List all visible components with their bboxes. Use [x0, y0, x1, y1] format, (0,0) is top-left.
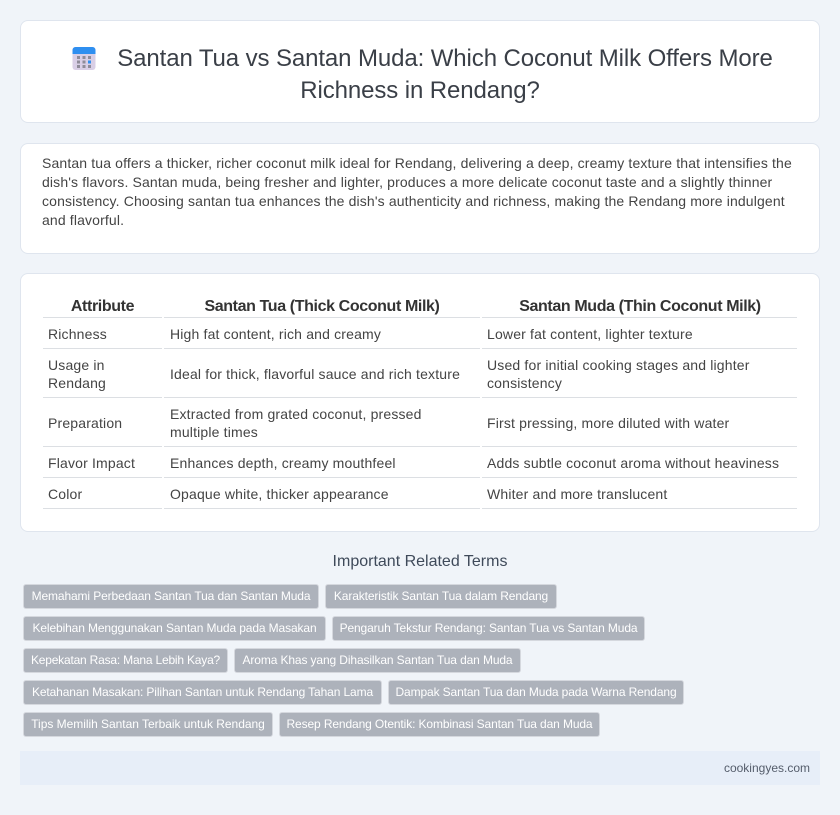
text block: introduction	[42, 155, 792, 228]
tag group: related terms: Aroma Khas yang Dihasilkan Santan Tua dan Muda	[242, 653, 512, 667]
table row: richness: Richness	[48, 326, 107, 342]
table row: color: Color	[48, 486, 82, 502]
table row: color	[48, 486, 668, 502]
table row: flavor impact: Enhances depth, creamy mouthfeel	[170, 455, 396, 471]
table row: flavor impact	[48, 455, 779, 471]
table row: preparation	[48, 406, 729, 440]
table row: richness: High fat content, rich and creamy	[170, 326, 381, 342]
tag group: related terms: Kepekatan Rasa: Mana Lebih Kaya?	[31, 653, 220, 667]
table row: color: Whiter and more translucent	[487, 486, 667, 502]
title: Richness in Rendang?	[300, 77, 540, 104]
table header row: Santan Tua (Thick Coconut Milk)	[204, 298, 440, 315]
footer	[20, 751, 820, 785]
tag group: related terms: Pengaruh Tekstur Rendang: Santan Tua vs Santan Muda	[340, 621, 637, 635]
panel: introduction	[20, 143, 820, 254]
tag group: related terms	[23, 584, 684, 737]
panel: comparison table	[20, 273, 820, 532]
table row: usage in rendang	[48, 357, 750, 391]
tag group: related terms: Karakteristik Santan Tua dalam Rendang	[334, 589, 548, 603]
footer source text: cookingyes.com	[724, 761, 810, 775]
tag group: related terms: Tips Memilih Santan Terbaik untuk Rendang	[31, 717, 265, 731]
tag group: related terms: Kelebihan Menggunakan Santan Muda pada Masakan	[32, 621, 317, 635]
title: Santan Tua vs Santan Muda: Which Coconut Milk Offers More	[117, 45, 773, 72]
title	[117, 45, 773, 104]
table header row: Attribute	[71, 298, 134, 315]
table row: preparation: First pressing, more diluted with water	[487, 415, 729, 431]
table row: preparation: multiple times	[170, 424, 258, 440]
text block: introduction: dish's flavors. Santan muda, being fresher and lighter, produces a more delicate coconut taste and a slightly thinner	[42, 174, 772, 190]
table row: flavor impact: Adds subtle coconut aroma without heaviness	[487, 455, 779, 471]
table row: usage in rendang: Usage in	[48, 357, 105, 373]
text block: introduction: and flavorful.	[42, 212, 124, 228]
tag group: related terms: Ketahanan Masakan: Pilihan Santan untuk Rendang Tahan Lama	[32, 685, 373, 699]
table header row: Santan Muda (Thin Coconut Milk)	[519, 298, 761, 315]
tag group: related terms: Resep Rendang Otentik: Kombinasi Santan Tua dan Muda	[287, 717, 592, 731]
panel: title header	[20, 20, 820, 123]
text block: introduction: Santan tua offers a thicker, richer coconut milk ideal for Rendang, delivering a deep, creamy texture that intensifies the	[42, 155, 792, 171]
tag group: related terms: Memahami Perbedaan Santan Tua dan Santan Muda	[32, 589, 310, 603]
table row: richness	[48, 326, 693, 342]
table header row	[71, 298, 761, 315]
table row: preparation: Extracted from grated coconut, pressed	[170, 406, 422, 422]
tag group: related terms: Dampak Santan Tua dan Muda pada Warna Rendang	[395, 685, 676, 699]
table row: usage in rendang: Used for initial cooking stages and lighter	[487, 357, 750, 373]
table row: usage in rendang: consistency	[487, 375, 562, 391]
table row: usage in rendang: Rendang	[48, 375, 106, 391]
heading: important related terms: Important Related Terms	[333, 553, 507, 570]
table row: flavor impact: Flavor Impact	[48, 455, 135, 471]
text block: introduction: consistency. Choosing santan tua enhances the dish's authenticity and richness, making the Rendang more indulgent	[42, 193, 785, 209]
table row: preparation: Preparation	[48, 415, 122, 431]
table row: richness: Lower fat content, lighter texture	[487, 326, 693, 342]
table row: usage in rendang: Ideal for thick, flavorful sauce and rich texture	[170, 366, 460, 382]
icon: calendar	[72, 47, 96, 70]
table row: color: Opaque white, thicker appearance	[170, 486, 389, 502]
